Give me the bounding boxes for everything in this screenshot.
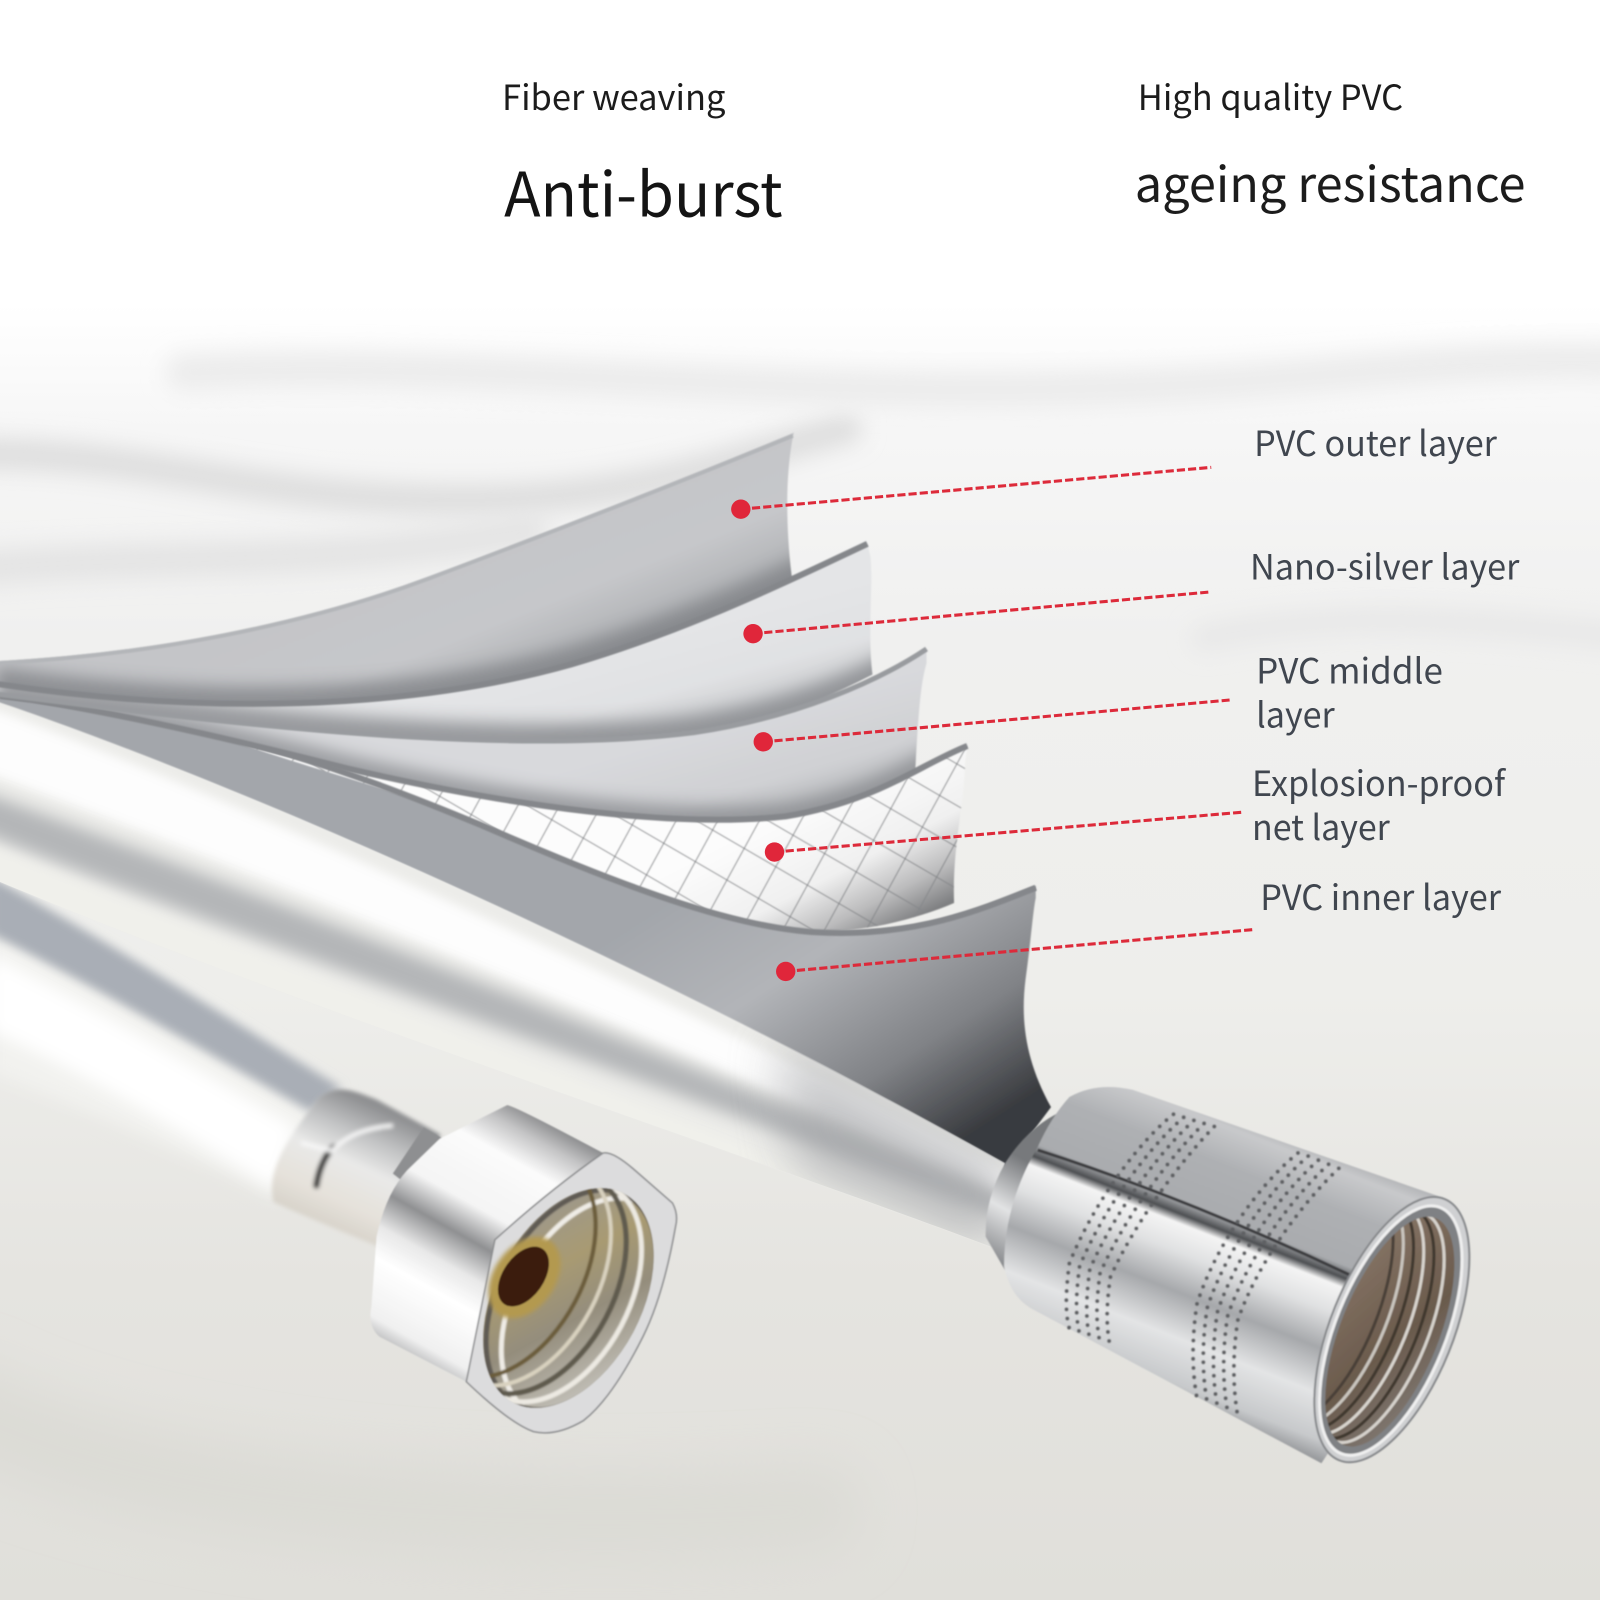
- callout: PVC outer layer: [731, 467, 1211, 519]
- middle layer lower shade: [101, 709, 916, 818]
- label: PVC outer layer: PVC outer layer: [1254, 416, 1497, 466]
- nano-silver lower shade: [0, 649, 927, 741]
- outer layer lower shade: [0, 554, 792, 702]
- heading: anti-burst: Anti-burst: [504, 145, 783, 234]
- tube white highlight: [0, 954, 296, 1189]
- layer: PVC inner: [0, 694, 1051, 1168]
- label: PVC middle layer: layer: [1256, 688, 1335, 738]
- nut threaded bore: [482, 1187, 655, 1409]
- callout: PVC middle layer: [754, 700, 1230, 752]
- label: Explosion-proof net layer: Explosion-proof: [1252, 756, 1507, 806]
- large knurled connector: [985, 1086, 1472, 1464]
- layer: PVC outer: [0, 433, 867, 704]
- connector body: [1004, 1087, 1459, 1463]
- nut body: [370, 1105, 603, 1382]
- connector dark reflection: [1038, 1150, 1353, 1277]
- tube silver band: [0, 791, 1010, 1219]
- outer layer lower rim: [0, 544, 867, 704]
- label: PVC middle layer: [1256, 644, 1443, 738]
- tube upper highlight: [0, 704, 1010, 1199]
- connector mouth highlight: [1290, 1187, 1492, 1474]
- connector collar: [986, 1107, 1071, 1270]
- layer: nano-silver: [0, 544, 927, 741]
- tube grey band: [0, 876, 342, 1112]
- nut water hole: [487, 1237, 560, 1316]
- inner layer rim: [0, 696, 1036, 933]
- outer layer top rim: [0, 436, 793, 663]
- nut neck: [393, 1128, 454, 1194]
- label: Nano-silver layer: Nano-silver layer: [1250, 540, 1520, 590]
- ferrule crimp highlight: [301, 1126, 393, 1151]
- tube end shading: [776, 1041, 1010, 1255]
- tube lower beige band: [0, 881, 25, 892]
- label: Explosion-proof net layer: [1252, 756, 1507, 850]
- label: PVC inner layer: PVC inner layer: [1260, 870, 1502, 920]
- middle layer lower rim: [0, 694, 967, 820]
- nut hex face: [466, 1153, 677, 1433]
- connector dimple band two: [1193, 1153, 1339, 1416]
- front hose tube: [0, 699, 1010, 1265]
- callout: PVC inner layer: [776, 930, 1253, 981]
- heading: high quality PVC: High quality PVC: [1138, 70, 1403, 120]
- callout: Nano-silver layer: [743, 592, 1211, 643]
- nano-silver lower rim: [0, 649, 927, 741]
- ferrule slit: [316, 1147, 334, 1186]
- small nut connector: [370, 1104, 678, 1434]
- callout lines and dots: [731, 467, 1253, 981]
- back hose tube: [0, 876, 342, 1199]
- connector threaded bore: [1324, 1216, 1455, 1447]
- layer: explosion-proof net: [235, 742, 967, 931]
- callout: Explosion-proof net layer: [765, 812, 1242, 862]
- label: Explosion-proof net layer: net layer: [1252, 800, 1390, 850]
- nut brass ring: [474, 1223, 575, 1332]
- layer: PVC middle: [0, 649, 967, 820]
- connector dimple band one: [1066, 1114, 1214, 1347]
- soft background waves: [0, 361, 1600, 1517]
- net mesh: [235, 742, 967, 931]
- heading: ageing resistance: ageing resistance: [1135, 146, 1526, 217]
- heading: fiber weaving: Fiber weaving: [502, 70, 726, 120]
- back hose ferrule: [272, 1090, 441, 1247]
- connector mouth rim: [1282, 1176, 1501, 1483]
- label: PVC middle layer: PVC middle: [1256, 644, 1443, 694]
